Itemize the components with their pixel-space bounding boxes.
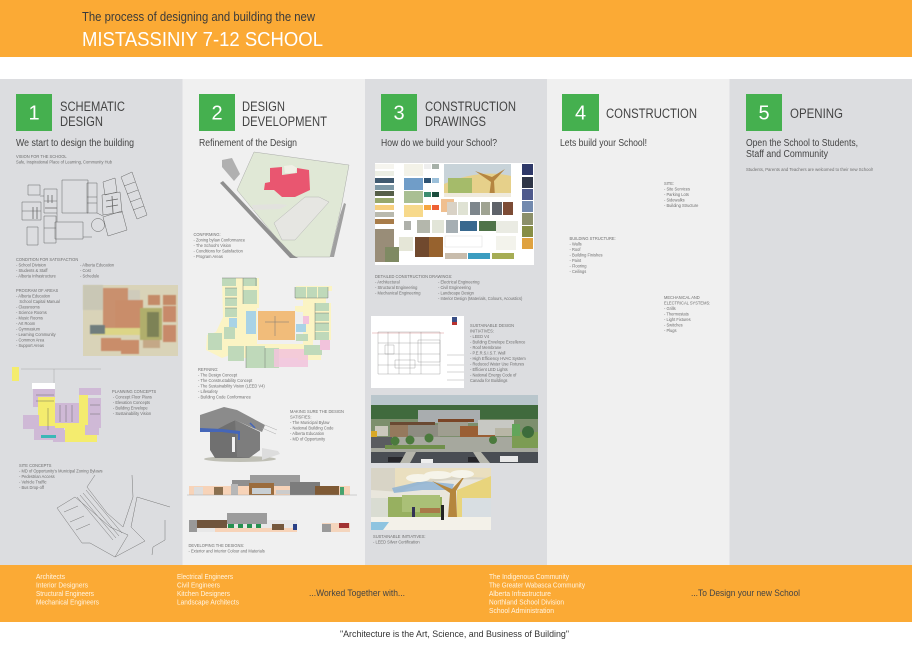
- consultants list two: Civil Engineers: [177, 582, 220, 590]
- vision text: VISION FOR THE SCHOOL: [16, 154, 67, 159]
- mechanical and electrical text: - Light Fixtures: [664, 317, 691, 322]
- program of areas text: [16, 288, 60, 348]
- condition text column two: - Cost: [80, 268, 91, 273]
- sustainable design initiatives text: - Reduced Water Use Fixtures: [470, 361, 525, 367]
- step 2 heading: DEVELOPMENT: [242, 114, 327, 129]
- step 3 heading: CONSTRUCTION: [425, 99, 516, 114]
- sketch floor plan: [22, 172, 147, 245]
- panel: construction drawings: [365, 79, 547, 565]
- refining text: - The Design Concept: [198, 372, 238, 378]
- sustainable design initiatives text: - Efficient LED Lights: [470, 367, 508, 372]
- building structure text: - Roof: [570, 247, 581, 252]
- sustainable design initiatives text: - P.E.R.S.I.S.T. Wall: [470, 350, 505, 356]
- consultants list two: Kitchen Designers: [177, 591, 230, 598]
- header banner: MISTASSINIY 7-12 SCHOOL: [82, 28, 323, 51]
- refining text: - The Constructability Concept: [198, 378, 253, 383]
- site text: - Sidewalks: [664, 197, 685, 203]
- mechanical and electrical text: - Switches: [664, 322, 683, 328]
- welcome text: Students, Parents and Teachers are welcomed to their new School!: [746, 167, 873, 172]
- step 1 badge: [16, 94, 52, 131]
- condition for satisfaction text: CONDITION FOR SATISFACTION: [16, 257, 78, 262]
- engineering list text: - Civil Engineering: [438, 285, 471, 290]
- step 1 badge: 1: [28, 102, 40, 124]
- green and orange floor plan: [206, 278, 332, 368]
- detailed construction drawings text: - Architectural: [375, 279, 400, 285]
- elevation drawing one: [187, 475, 357, 495]
- building structure text: - Building Finishes: [570, 252, 603, 258]
- detailed construction drawings text: - Structural Engineering: [375, 285, 418, 290]
- planning concepts text: - Sustainability Vision: [113, 411, 152, 416]
- sustainable design initiatives text: - LEED V4: [470, 334, 490, 339]
- site text: - Site Services: [664, 186, 691, 192]
- refining text: - The Sustainability Vision (LEED V4): [198, 383, 265, 389]
- planning concepts text: - Building Envelope: [113, 405, 148, 411]
- site text: - Building Structure: [664, 203, 699, 208]
- panel: design development: [182, 79, 365, 565]
- community list: The Indigenous Community: [489, 574, 569, 581]
- refining text: - Building Code Conformance: [198, 394, 251, 400]
- 3D section model: [200, 407, 280, 462]
- sustainable design initiatives text: - Roof Membrane: [470, 345, 502, 350]
- step 4 subtitle: Lets build your School!: [560, 138, 647, 149]
- engineering list text: - Electrical Engineering: [438, 279, 480, 285]
- refining text: - Lifesafety: [198, 389, 218, 394]
- mechanical and electrical text: ELECTRICAL SYSTEMS:: [664, 300, 710, 306]
- building structure text: - Paint: [570, 258, 582, 263]
- to design text: ...To Design your new School: [691, 588, 800, 598]
- engineering list text: [438, 279, 523, 301]
- planning concepts text: [112, 389, 156, 416]
- sustainable design initiatives text: SUSTAINABLE DESIGN: [470, 323, 514, 328]
- step 5 badge: [746, 94, 782, 131]
- program of areas text: - Alberta Education: [16, 293, 51, 299]
- making sure text: MAKING SURE THE DESIGN: [290, 409, 344, 414]
- header banner: The process of designing and building the new: [82, 9, 316, 24]
- developing text: [188, 543, 265, 554]
- planning concepts text: - Elevation Concepts: [113, 400, 151, 405]
- condition text column two: - Schedule: [80, 273, 100, 279]
- developing text: DEVELOPING THE DESIGNS:: [188, 543, 244, 548]
- confirming text: - The School's Vision: [194, 243, 232, 248]
- step 4 heading: CONSTRUCTION: [606, 106, 697, 121]
- site concepts text: - Vehicle Traffic: [19, 479, 47, 485]
- confirming text: - Program Areas: [194, 254, 224, 259]
- step 1 heading: [60, 99, 125, 129]
- program of areas text: - Classrooms: [16, 304, 41, 310]
- step 5 heading: OPENING: [790, 106, 843, 121]
- panel: opening: [730, 79, 912, 565]
- sustainable design initiatives text: Canada for Buildings: [470, 378, 508, 383]
- consultants list two: Landscape Architects: [177, 600, 239, 606]
- step 5 subtitle: [746, 138, 858, 160]
- planning concepts text: - Concept Floor Plans: [113, 394, 153, 400]
- site text: [664, 181, 699, 208]
- building structure text: BUILDING STRUCTURE:: [570, 236, 616, 241]
- step 3 heading: [425, 99, 516, 129]
- making sure text: - Alberta Education: [290, 431, 325, 436]
- building structure text: [570, 236, 616, 274]
- elevation drawing three: [322, 523, 350, 532]
- condition for satisfaction text: [16, 257, 78, 279]
- confirming text: [194, 232, 246, 259]
- detailed construction drawings text: [375, 274, 452, 296]
- program of areas text: - Support Areas: [16, 343, 45, 348]
- site line drawing: [57, 475, 170, 557]
- community list: Alberta Infrastructure: [489, 591, 551, 598]
- step 1 heading: SCHEMATIC: [60, 99, 125, 114]
- mechanical and electrical text: - Grills: [664, 306, 676, 311]
- materials and colour board: [375, 163, 534, 265]
- sustainable design initiatives text: - National Energy Code of: [470, 372, 517, 378]
- engineering list text: - Interior Design (Materials, Colours, Acoustics): [438, 296, 523, 301]
- vision text: [16, 154, 113, 165]
- confirming text: - Conditions for Satisfaction: [194, 248, 243, 254]
- consultants list one: Mechanical Engineers: [36, 600, 99, 606]
- sustainable initiatives text: [373, 534, 426, 545]
- condition for satisfaction text: - School Division: [16, 262, 47, 268]
- making sure text: - The Municipal Bylaw: [290, 420, 330, 425]
- making sure text: [290, 409, 344, 442]
- footer banner: [0, 565, 912, 622]
- community list: The Greater Wabasca Community: [489, 582, 585, 590]
- step 3 subtitle: How do we build your School?: [381, 138, 497, 149]
- step 3 badge: 3: [393, 102, 405, 124]
- sustainable initiatives text: SUSTAINABLE INITIATIVES:: [373, 534, 426, 539]
- consultants list one: Architects: [36, 574, 65, 581]
- refining text: REFINING:: [198, 367, 218, 372]
- worked together text: ...Worked Together with...: [309, 588, 405, 598]
- mechanical and electrical text: [664, 295, 710, 333]
- program of areas text: - Art Room: [16, 321, 36, 326]
- header banner: [0, 0, 912, 57]
- condition for satisfaction text: - Students & Staff: [16, 268, 48, 273]
- building structure text: - Ceilings: [570, 269, 587, 274]
- step 2 heading: DESIGN: [242, 99, 285, 114]
- site plan with red building: [220, 152, 349, 258]
- planning concepts text: PLANNING CONCEPTS: [112, 389, 156, 394]
- panel: construction: [547, 79, 730, 565]
- consultants list one: [36, 574, 99, 606]
- architectural drawing sheet: [371, 316, 464, 388]
- interior rendering: [371, 468, 491, 530]
- condition text column two: [80, 262, 115, 279]
- program of areas text: School Capital Manual: [19, 299, 60, 304]
- site concepts text: - MD of Opportunity's Municipal Zoning Bylaws: [19, 468, 103, 474]
- step 4 badge: 4: [575, 102, 586, 124]
- step 5 subtitle: Staff and Community: [746, 149, 828, 160]
- step 2 heading: [242, 99, 327, 129]
- sustainable design initiatives text: [470, 323, 526, 383]
- making sure text: - National Building Code: [290, 425, 334, 431]
- step 2 badge: 2: [211, 102, 223, 124]
- community list: [489, 574, 585, 615]
- panel: schematic design: [0, 79, 182, 565]
- making sure text: - MD of Opportunity: [290, 436, 326, 442]
- program of areas text: - Learning Community: [16, 332, 56, 337]
- program of areas text: - Science Rooms: [16, 310, 47, 315]
- site concepts text: [19, 463, 103, 490]
- quote: "Architecture is the Art, Science, and Business of Building": [340, 629, 569, 640]
- detailed construction drawings text: DETAILED CONSTRUCTION DRAWINGS:: [375, 274, 452, 279]
- exterior rendering: [371, 395, 538, 463]
- step 5 badge: 5: [758, 102, 770, 124]
- vision text: Safe, Inspirational Place of Learning, Community Hub: [16, 159, 113, 165]
- building structure text: - Walls: [570, 241, 582, 247]
- site concepts text: - Bus Drop-off: [19, 485, 45, 490]
- mechanical and electrical text: - Thermostats: [664, 311, 690, 317]
- step 5 subtitle: Open the School to Students,: [746, 138, 858, 149]
- consultants list two: [177, 574, 239, 606]
- developing text: - Exterior and Interior Colour and Materials: [188, 548, 265, 554]
- community list: School Administration: [489, 608, 554, 615]
- program of areas text: - Gymnasium: [16, 326, 40, 332]
- step 3 badge: [381, 94, 417, 131]
- making sure text: SATISFIES:: [290, 414, 311, 420]
- consultants list two: Electrical Engineers: [177, 574, 233, 581]
- step 3 heading: DRAWINGS: [425, 114, 486, 129]
- program of areas text: - Music Rooms: [16, 315, 44, 321]
- sustainable design initiatives text: INITIATIVES:: [470, 328, 494, 334]
- step 1 heading: DESIGN: [60, 114, 103, 129]
- detailed construction drawings text: - Mechanical Engineering: [375, 290, 421, 296]
- elevation drawing two: [189, 513, 297, 532]
- site concepts text: SITE CONCEPTS: [19, 463, 52, 468]
- confirming text: CONFIRMING:: [194, 232, 221, 237]
- step 4 badge: [562, 94, 599, 131]
- sustainable design initiatives text: - High Efficiency HVAC System: [470, 356, 526, 361]
- purple and yellow plan: [12, 367, 101, 442]
- program of areas text: PROGRAM OF AREAS: [16, 288, 58, 293]
- site text: - Parking Lots: [664, 192, 690, 197]
- sustainable initiatives text: - LEED Silver Certification: [373, 539, 420, 545]
- consultants list one: Interior Designers: [36, 582, 88, 590]
- community list: Northland School Division: [489, 600, 564, 606]
- step 2 subtitle: Refinement of the Design: [199, 138, 297, 149]
- refining text: [198, 367, 265, 400]
- program of areas text: - Common Area: [16, 337, 45, 343]
- site concepts text: - Pedestrian Access: [19, 474, 55, 479]
- consultants list one: Structural Engineers: [36, 591, 94, 598]
- mechanical and electrical text: - Plugs: [664, 328, 677, 333]
- sustainable design initiatives text: - Building Envelope Excellence: [470, 339, 526, 345]
- coloured floor plan: [83, 285, 178, 356]
- building structure text: - Flooring: [570, 263, 587, 269]
- condition text column two: - Alberta Education: [80, 262, 115, 268]
- mechanical and electrical text: MECHANICAL AND: [664, 295, 700, 300]
- engineering list text: - Landscape Design: [438, 290, 474, 296]
- condition for satisfaction text: - Alberta Infrastructure: [16, 273, 56, 279]
- step 2 badge: [199, 94, 235, 131]
- confirming text: - Zoning bylaw Conformance: [194, 237, 246, 243]
- site text: SITE:: [664, 181, 674, 186]
- step 1 subtitle: We start to design the building: [16, 138, 134, 149]
